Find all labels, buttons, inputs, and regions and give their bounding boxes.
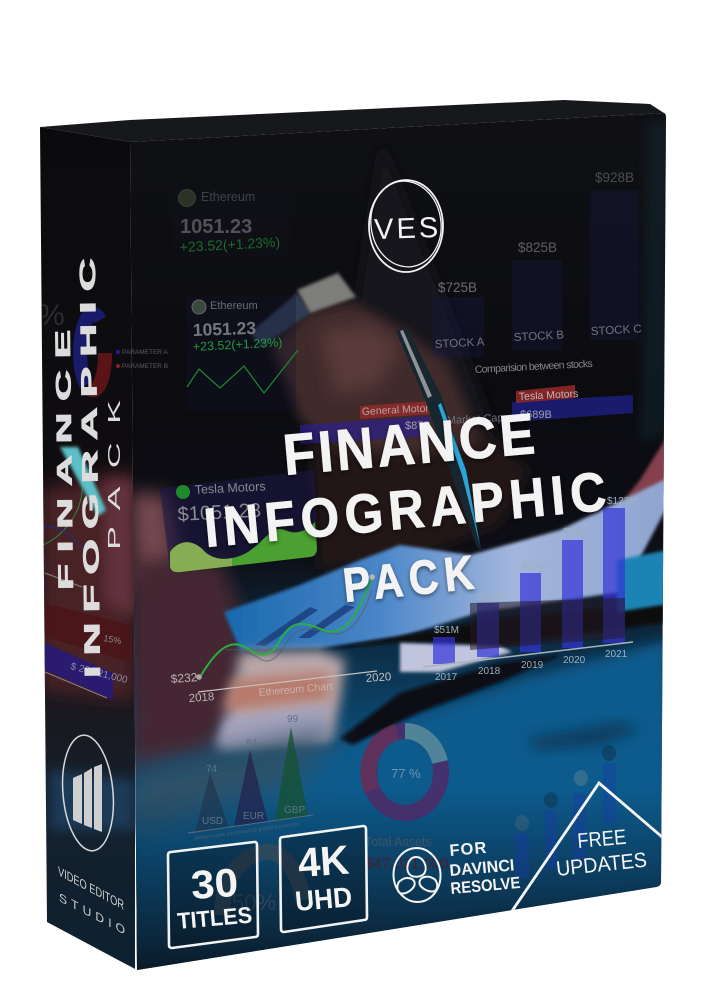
pyramid chart: currencies: 74 xyxy=(206,764,218,775)
market cap chart: Market Cap xyxy=(447,412,504,427)
stat card: Ethereum top: +23.52(+1.23%) xyxy=(179,234,280,255)
text: studio: STUDIO xyxy=(59,890,125,937)
donut chart: 50 percent xyxy=(222,852,303,915)
bar chart: revenue 2017-2021 xyxy=(423,496,638,683)
bar chart: revenue 2017-2021: $99M xyxy=(563,527,588,538)
total assets label: $47,021,000 xyxy=(365,855,448,872)
photo: right fingers xyxy=(622,438,664,508)
market cap chart: $689B xyxy=(520,409,552,421)
photo: lower desk blue xyxy=(130,640,668,975)
stat card: Ethereum line chart xyxy=(186,296,298,411)
photo: dark band upper xyxy=(320,602,668,650)
spine chart: percent bars: 15% xyxy=(103,633,122,646)
pyramid chart: currencies xyxy=(188,714,313,842)
icon: DaVinci Resolve logo xyxy=(392,846,442,904)
bar chart: revenue 2017-2021: 2020 xyxy=(563,655,586,666)
photo: blurred foreground hand top xyxy=(130,492,178,600)
market cap chart: General Motors xyxy=(362,402,434,418)
bottom dark fade xyxy=(136,806,662,970)
text: video editor: VIDEO EDITOR xyxy=(58,863,124,913)
badge: 4K UHD: UHD xyxy=(294,881,353,917)
logo: VES circle: VES xyxy=(374,212,442,246)
icon: Video Editor Studio logo xyxy=(58,733,118,853)
bar chart: coin rankings xyxy=(515,745,616,878)
bar chart: revenue 2017-2021: 2018 xyxy=(478,666,501,677)
donut chart: 77 percent: 77 % xyxy=(391,766,421,781)
market cap chart: Tesla Motors xyxy=(519,388,579,403)
bar chart: revenue 2017-2021: $51M xyxy=(434,625,459,636)
photo: white book pages xyxy=(222,650,345,750)
logo: VES circle xyxy=(365,177,447,272)
text: for DaVinci Resolve xyxy=(449,839,521,898)
title: Finance Infographic Pack: FINANCE xyxy=(280,401,537,488)
photo: shirt sleeve xyxy=(250,293,310,347)
line chart: Ethereum Chart: $232 xyxy=(170,670,198,686)
photo: dim palm area under hand xyxy=(310,420,530,570)
stat card: Ethereum top: 1051.23 xyxy=(180,216,252,238)
spine title: infographic: INFOGRAPHIC xyxy=(75,258,105,678)
market cap chart: $87B xyxy=(405,420,431,432)
bar chart: revenue 2017-2021: $83M xyxy=(521,561,546,572)
ribbon: free updates triangle xyxy=(510,783,668,914)
pyramid chart: currencies: 99 xyxy=(287,714,299,725)
ribbon: free updates triangle: FREE xyxy=(576,826,627,853)
spine photo: pink highlight xyxy=(105,480,135,620)
parameter legend crossing the corner: PARAMETER A xyxy=(122,349,168,356)
parameter legend crossing the corner: PARAMETER B xyxy=(122,363,168,370)
bar chart: revenue 2017-2021: 2017 xyxy=(435,672,458,683)
pyramid chart: currencies: 84 xyxy=(246,738,258,749)
photo: pointing hand xyxy=(272,300,480,455)
donut chart: 50 percent: 50% xyxy=(232,890,276,915)
spine photo: blue band lower xyxy=(50,770,135,830)
badge: 30 titles: 30 xyxy=(190,861,240,908)
pyramid chart: currencies: USD xyxy=(202,816,223,827)
photo: salmon page area xyxy=(222,672,330,712)
photo: shirt cuff xyxy=(297,273,356,313)
bar chart: stocks comparison: STOCK C xyxy=(591,323,642,338)
spine title: pack: PACK xyxy=(104,400,124,550)
photo: blurred left lower xyxy=(130,728,340,835)
bar chart: stocks comparison: STOCK A xyxy=(435,336,485,351)
area chart: Tesla Motors xyxy=(160,470,317,572)
bar chart: revenue 2017-2021: $63M xyxy=(478,592,503,603)
bar chart: stocks comparison: $928B xyxy=(595,170,634,185)
stat card: Ethereum line chart: Ethereum xyxy=(210,300,258,312)
spine photo: blurred red hand xyxy=(40,470,135,700)
photo: lavender pages right xyxy=(400,643,512,672)
bar chart: revenue 2017-2021: $123M xyxy=(607,496,638,507)
ribbon: free updates triangle: UPDATES xyxy=(555,849,648,881)
pyramid chart: currencies: GBP xyxy=(284,805,305,816)
box lid top face xyxy=(40,100,664,142)
title: Finance Infographic Pack xyxy=(202,401,609,613)
photo: dark book cover xyxy=(340,655,560,745)
area chart: Tesla Motors: $1051.23 xyxy=(177,500,262,526)
title: Finance Infographic Pack: INFOGRAPHIC xyxy=(202,462,609,560)
spine chart: percent bars: $ 23,521,000 xyxy=(69,661,129,686)
text: for DaVinci Resolve: FOR xyxy=(449,839,488,860)
photo: teal notebook xyxy=(617,550,668,612)
donut chart: 77 percent xyxy=(368,731,441,813)
bar chart: revenue 2017-2021: 2019 xyxy=(521,660,544,671)
title: Finance Infographic Pack: PACK xyxy=(341,547,476,613)
bar chart: stocks comparison: Comparision between stocks xyxy=(475,358,593,376)
stat card: Ethereum top: Ethereum xyxy=(201,190,255,204)
bar chart: stocks comparison: $825B xyxy=(518,240,557,255)
stat card: Ethereum line chart: +23.52(+1.23%) xyxy=(192,335,283,354)
parameter legend crossing the corner xyxy=(116,349,168,370)
photo: knuckle highlight xyxy=(320,325,400,395)
bar chart: stocks comparison xyxy=(433,170,642,376)
bar chart: revenue 2017-2021: 2021 xyxy=(605,649,628,660)
photo: lavender lower page xyxy=(215,705,330,750)
spine title: finance: FINANCE xyxy=(51,330,78,590)
bar chart: stocks comparison: $725B xyxy=(438,280,477,295)
pyramid chart: currencies: EUR xyxy=(243,811,264,822)
spine chart: percent bars xyxy=(38,299,130,700)
stat card: Ethereum line chart: 1051.23 xyxy=(192,318,257,340)
badge: 4K UHD xyxy=(280,826,367,932)
line chart: Ethereum Chart: 2018 xyxy=(188,691,215,705)
photo: blurred foreground hand xyxy=(130,560,245,770)
panel: box front face xyxy=(125,100,670,980)
photo: suit highlight xyxy=(362,166,492,434)
spine chart: arcs xyxy=(43,480,82,587)
badge: 30 titles xyxy=(168,842,258,948)
panel: box spine xyxy=(35,120,135,980)
pen xyxy=(396,328,482,552)
badge: 30 titles: TITLES xyxy=(176,902,253,934)
area chart: Tesla Motors: Tesla Motors xyxy=(194,479,266,497)
photo: blue paper sheet xyxy=(224,478,668,650)
market cap chart xyxy=(300,385,633,444)
text: for DaVinci Resolve: DAVINCI xyxy=(449,856,515,880)
stat card: Ethereum top xyxy=(178,189,280,252)
line chart: Ethereum Chart xyxy=(170,574,392,705)
pyramid chart: currencies: Indian rupee compared to global currencies xyxy=(194,821,300,842)
spine chart: donut xyxy=(80,314,105,390)
text: for DaVinci Resolve: RESOLVE xyxy=(450,874,521,898)
badge: 4K UHD: 4K xyxy=(296,837,351,886)
total assets label xyxy=(367,836,448,870)
photo: right edge teal xyxy=(640,118,668,445)
total assets label: Total Assets xyxy=(365,835,432,849)
spine chart: percent bars: % xyxy=(38,299,65,332)
line chart: Ethereum Chart: 2020 xyxy=(365,671,392,685)
photo: paper chart stripes xyxy=(255,605,355,646)
line chart: Ethereum Chart: Ethereum Chart xyxy=(258,681,333,699)
bar chart: stocks comparison: STOCK B xyxy=(514,329,565,344)
product box illustration xyxy=(40,100,666,970)
photo: blue desk dark patches xyxy=(530,722,640,750)
spine photo: teal streak xyxy=(60,447,106,516)
